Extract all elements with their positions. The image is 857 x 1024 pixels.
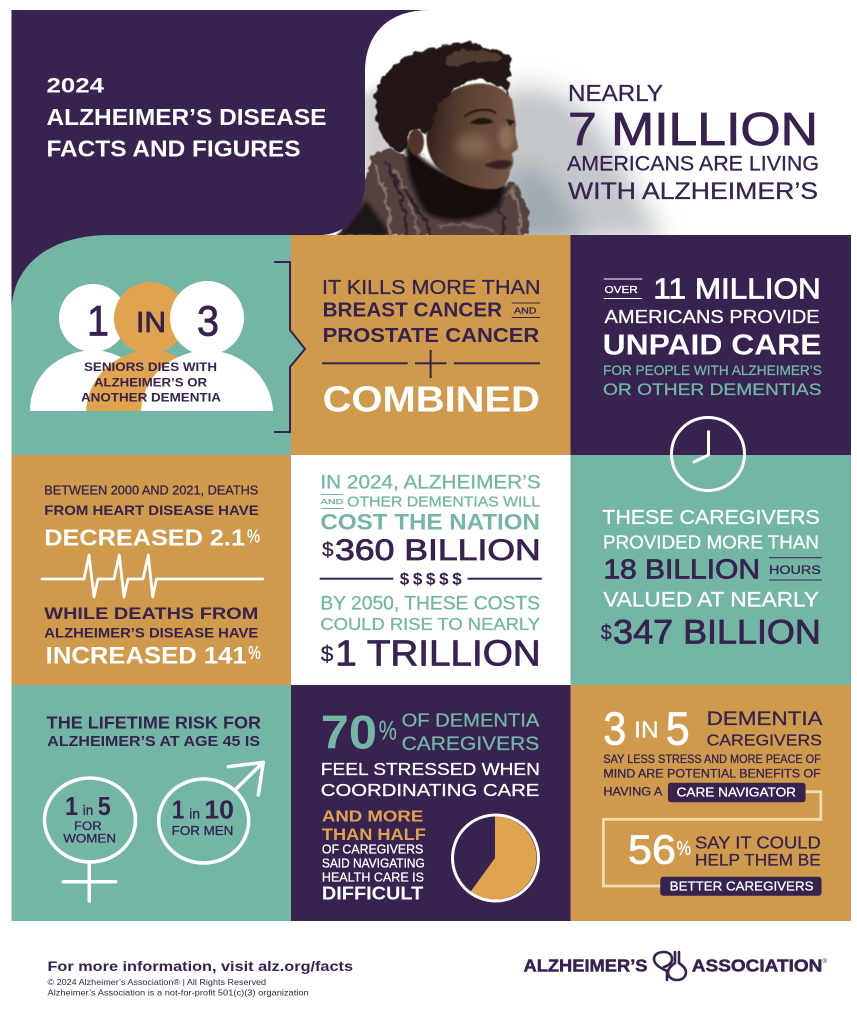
text: over 11 million: AMERICANS PROVIDE [604, 306, 820, 327]
connector line [603, 792, 821, 886]
text: seniors dies with: ANOTHER DEMENTIA [81, 393, 221, 405]
text: 2050 cost [320, 592, 541, 674]
text: over 11 million: OVER [604, 285, 638, 296]
text: 70 percent of caregivers: OF DEMENTIA [402, 710, 539, 730]
footer: more information: Alzheimer’s Association is a not-for-profit 501(c)(3) organization [48, 988, 309, 998]
statistic: 1 in 10 for men: 1 [172, 794, 184, 824]
panel: heart disease vs alzheimer's [12, 455, 291, 685]
text: combined: COMBINED [323, 379, 540, 420]
text: caregiver hours: 347 BILLION [613, 613, 821, 651]
text: caregiver hours: 18 BILLION [603, 553, 760, 584]
label: better caregivers: BETTER CAREGIVERS [670, 880, 814, 894]
text: 70 percent of caregivers: CAREGIVERS [402, 733, 539, 755]
statistic: 3 in 5: CAREGIVERS [707, 733, 822, 750]
text: deaths from heart disease [44, 483, 260, 550]
text: 2050 cost: 1 TRILLION [335, 633, 541, 674]
text: it kills more than: PROSTATE CANCER [323, 325, 540, 347]
text: for people with alzheimer's: OR OTHER DEMENTIAS [603, 380, 822, 399]
text: deaths from heart disease: FROM HEART DISEASE HAVE [44, 502, 259, 518]
label: care navigator [668, 783, 806, 802]
text: deaths from heart disease: BETWEEN 2000 AND 2021, DEATHS [44, 483, 258, 497]
text: it kills more than: BREAST CANCER [323, 300, 503, 322]
text: lifetime risk heading: ALZHEIMER’S AT AGE 45 IS [47, 734, 260, 750]
icon: heartbeat line [42, 555, 263, 597]
logo: alzheimer's association [524, 952, 828, 980]
text: more than half: AND MORE [322, 809, 424, 826]
text: 70 percent of caregivers: 70 [321, 705, 377, 758]
text: 2050 cost: $ [321, 642, 334, 667]
logo: alzheimer's association: ® [822, 958, 828, 965]
text: caregiver hours: $ [601, 621, 612, 644]
text: it kills more than [322, 277, 540, 347]
text: 2024 cost: OTHER DEMENTIAS WILL [347, 494, 540, 511]
statistic: 1 in 10 for men: 10 [204, 794, 234, 824]
statistic: 1 in 5 for women: FOR [74, 819, 102, 833]
text: 2050 cost: BY 2050, THESE COSTS [320, 592, 540, 614]
statistic: 1 in 5 for women: 5 [98, 791, 111, 821]
text: more than half: HEALTH CARE IS [322, 869, 424, 884]
statistic: 3 in 5 [603, 702, 823, 754]
icon: clock [672, 418, 744, 490]
text: more than half: SAID NAVIGATING [322, 855, 425, 870]
statistic: 1 in 10 for men [172, 794, 234, 838]
text: 70 percent of caregivers: FEEL STRESSED WHEN [321, 759, 540, 779]
statistic: 1 in 10 for men: FOR MEN [172, 823, 233, 838]
text: it kills more than: IT KILLS MORE THAN [322, 277, 540, 299]
text: deaths from alzheimer's: WHILE DEATHS FROM [44, 604, 258, 623]
text: deaths from alzheimer's [44, 604, 261, 669]
statistic: 3 in 5: 5 [666, 702, 690, 754]
text: over 11 million: UNPAID CARE [603, 329, 822, 361]
text: caregiver hours: VALUED AT NEARLY [603, 589, 819, 612]
statistic: 3 in 5: 3 [603, 702, 626, 754]
statistic: 1 in 3 [87, 298, 219, 346]
panel: care navigator [570, 685, 851, 921]
label: care navigator: CARE NAVIGATOR [677, 786, 796, 800]
footer: more information: For more information, visit alz.org/facts [48, 959, 353, 974]
panel: kills more than cancers [291, 235, 570, 455]
text: more than half: OF CAREGIVERS [322, 841, 424, 856]
text: 2024 cost: $ [322, 540, 334, 562]
headline: nearly 7 million: 7 MILLION [568, 103, 818, 155]
text: caregiver hours [601, 507, 822, 651]
panel: caregivers stressed [291, 685, 570, 921]
arrow: bracket pointing right [274, 262, 305, 432]
text: deaths from alzheimer's: ALZHEIMER’S DISEASE HAVE [44, 624, 258, 640]
panel: caregiver hours and value [570, 455, 851, 685]
text: less stress: SAY LESS STRESS AND MORE PEACE OF [603, 754, 821, 766]
text: 2024 cost: COST THE NATION [320, 510, 540, 535]
text: deaths from alzheimer's: % [248, 643, 261, 663]
text: seniors dies with [81, 362, 221, 405]
statistic: 1 in 3: 3 [197, 298, 219, 346]
text: deaths from heart disease: DECREASED 2.1 [44, 524, 245, 550]
text: 2050 cost: COULD RISE TO NEARLY [320, 614, 540, 634]
statistic: 56 percent: 56 [628, 826, 676, 872]
logo: alzheimer's association: ASSOCIATION [692, 956, 822, 976]
footer: more information [48, 959, 353, 998]
headline: nearly 7 million: WITH ALZHEIMER’S [568, 178, 818, 205]
text: deaths from heart disease: % [247, 526, 260, 546]
title: 2024 [46, 75, 104, 98]
icon: logo symbol [654, 952, 686, 980]
text: for people with alzheimer's: FOR PEOPLE WITH ALZHEIMER’S [603, 362, 822, 378]
text: it kills more than: AND [514, 307, 537, 316]
text: lifetime risk heading [47, 712, 261, 750]
text: for people with alzheimer's [603, 362, 822, 399]
text: less stress: HAVING A [603, 787, 663, 799]
text: seniors dies with: SENIORS DIES WITH [84, 362, 217, 374]
text: 2024 cost [320, 471, 541, 567]
divider with plus sign [322, 350, 540, 378]
text: deaths from alzheimer's: INCREASED 141 [46, 642, 247, 669]
title: ALZHEIMER’S DISEASE [46, 104, 326, 130]
logo: alzheimer's association: ALZHEIMER’S [524, 956, 648, 976]
text: 70 percent of caregivers: COORDINATING CARE [321, 780, 540, 800]
text: more than half: THAN HALF [322, 825, 426, 844]
headline: nearly 7 million: NEARLY [568, 80, 663, 106]
footer: more information: © 2024 Alzheimer’s Association® | All Rights Reserved [48, 977, 266, 987]
label: better caregivers [660, 877, 822, 896]
headline: nearly 7 million [567, 80, 819, 205]
text: 2024 cost: 360 BILLION [335, 534, 541, 567]
statistic: 1 in 5 for women: 1 [65, 791, 78, 821]
icon: three people [30, 281, 273, 411]
text: over 11 million: 11 MILLION [653, 273, 821, 305]
headline: nearly 7 million: AMERICANS ARE LIVING [567, 153, 819, 176]
statistic: 3 in 5: DEMENTIA [707, 709, 823, 730]
pie chart: more than half [452, 815, 538, 901]
statistic: 1 in 5 for women: WOMEN [63, 831, 116, 845]
text: more than half [322, 809, 426, 903]
text: caregiver hours: THESE CAREGIVERS [602, 507, 820, 529]
statistic: 1 in 3: IN [136, 307, 166, 339]
panel: cost to the nation [291, 455, 570, 685]
icon: female symbol [44, 778, 136, 901]
statistic: 56 percent: % [677, 838, 691, 860]
text: less stress: MIND ARE POTENTIAL BENEFITS OF [603, 769, 821, 781]
text: seniors dies with: ALZHEIMER’S OR [94, 378, 208, 390]
statistic: 1 in 5 for women [63, 791, 116, 845]
text: over 11 million [603, 273, 822, 361]
panel: 1 in 3 seniors [12, 235, 291, 455]
divider with dollar signs: $$$$$ [400, 569, 462, 588]
panel: unpaid care [570, 235, 851, 455]
hero panel: purple title background [12, 10, 430, 315]
statistic: 1 in 5 for women: in [83, 802, 93, 818]
icon: male symbol [159, 762, 263, 863]
statistic: 1 in 10 for men: in [189, 805, 200, 821]
title [46, 75, 326, 162]
panel: lifetime risk [12, 685, 291, 921]
text: lifetime risk heading: THE LIFETIME RISK FOR [47, 712, 261, 732]
statistic: 56 percent: SAY IT COULD [695, 832, 821, 852]
text: 70 percent of caregivers: % [379, 715, 397, 745]
text: caregiver hours: HOURS [769, 563, 821, 577]
text: 70 percent of caregivers [321, 705, 540, 800]
text: 2024 cost: IN 2024, ALZHEIMER’S [320, 471, 541, 493]
photo: woman looking into the distance [338, 41, 665, 240]
text: more than half: DIFFICULT [322, 882, 424, 903]
statistic: 1 in 3: 1 [87, 298, 109, 346]
text: 2024 cost: AND [321, 497, 344, 506]
statistic: 3 in 5: IN [634, 717, 658, 743]
text: caregiver hours: PROVIDED MORE THAN [603, 532, 819, 552]
statistic: 56 percent [628, 826, 821, 872]
statistic: 56 percent: HELP THEM BE [695, 850, 821, 869]
title: FACTS AND FIGURES [46, 136, 300, 162]
text: less stress [603, 754, 821, 799]
